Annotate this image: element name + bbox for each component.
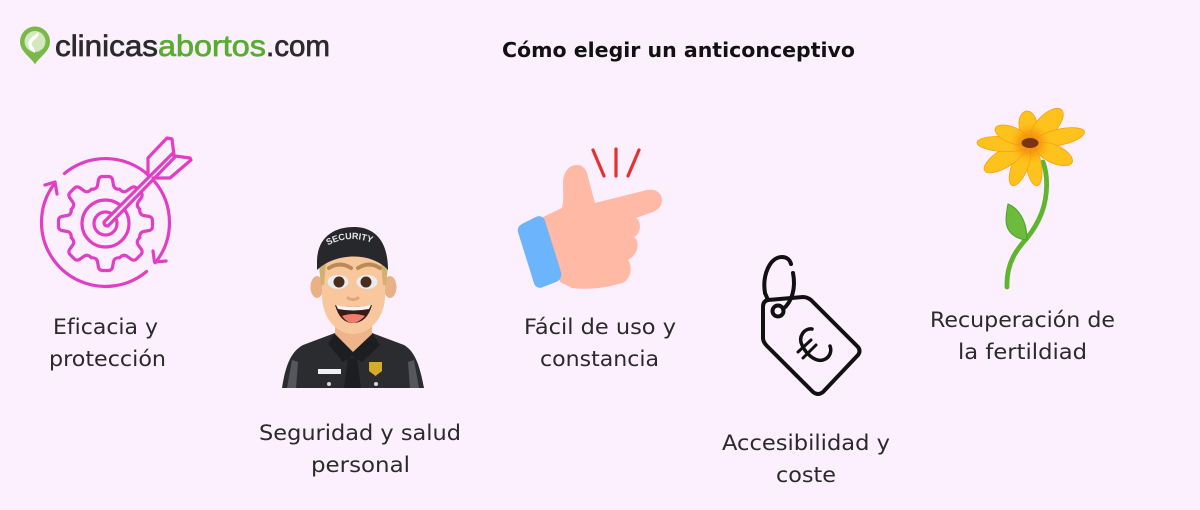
label <box>524 315 676 371</box>
panel: fácil de uso y constancia <box>519 149 676 371</box>
eyes <box>328 275 348 289</box>
icon: snapping hand <box>519 149 662 289</box>
cap <box>317 227 388 270</box>
label: constancia <box>540 347 659 371</box>
logo wordmark: abortos <box>158 30 266 63</box>
logo wordmark: clinicas <box>55 30 158 63</box>
snap lines <box>593 149 639 176</box>
panel: eficacia y protección <box>41 138 191 371</box>
label: Accesibilidad y <box>722 431 890 455</box>
icon: euro price tag <box>763 257 860 394</box>
mouth <box>335 305 372 323</box>
icon: security guard <box>282 227 424 388</box>
cuff <box>519 217 560 287</box>
label: personal <box>311 453 410 477</box>
torso <box>282 333 424 388</box>
label: la fertildiad <box>958 340 1087 364</box>
label <box>722 431 890 487</box>
icon: gear target and arrow <box>41 138 191 286</box>
label: coste <box>776 463 836 487</box>
label: protección <box>49 347 166 371</box>
flower glow <box>1010 123 1050 163</box>
title: Cómo elegir un anticonceptivo <box>502 38 855 62</box>
hand <box>543 165 662 289</box>
logo wordmark: .com <box>266 30 330 63</box>
icon: yellow flower <box>977 103 1086 287</box>
flower centre <box>1022 138 1038 148</box>
icon: green map pin <box>20 27 50 64</box>
label: Seguridad y salud <box>259 421 461 445</box>
panel: seguridad y salud personal <box>259 227 461 477</box>
panel: recuperación de la fertilidad <box>930 103 1115 364</box>
label <box>49 315 166 371</box>
neck <box>335 322 372 352</box>
label <box>259 421 461 477</box>
petals <box>977 103 1086 188</box>
label: Fácil de uso y <box>524 315 676 339</box>
label: Eficacia y <box>53 315 158 339</box>
panel: accesibilidad y coste <box>722 257 890 487</box>
stem <box>1007 162 1047 287</box>
leaf <box>1006 204 1027 240</box>
logo: clinicasabortos.com <box>20 27 330 64</box>
label: Recuperación de <box>930 308 1115 332</box>
face <box>322 250 385 334</box>
cap text: SECURITY <box>326 232 374 245</box>
logo wordmark <box>55 30 330 63</box>
nose <box>348 298 358 300</box>
ears <box>310 276 324 298</box>
eyebrows <box>329 264 380 268</box>
label <box>930 308 1115 364</box>
